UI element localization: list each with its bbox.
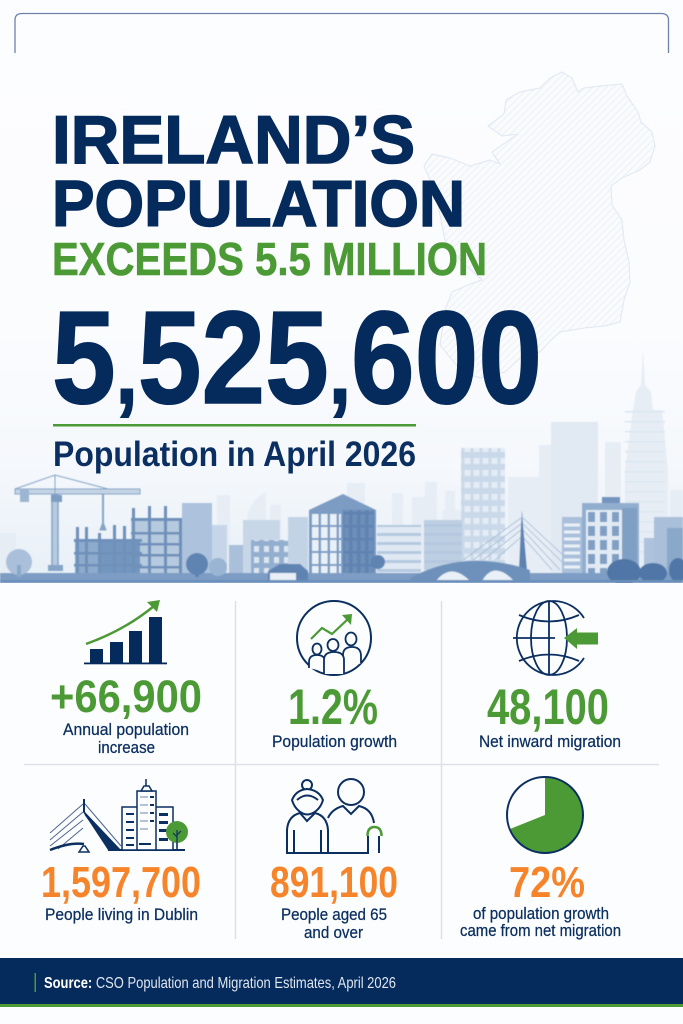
- ground strip: [0, 573, 683, 583]
- stat: Dublin: [41, 779, 201, 924]
- construction site: [74, 506, 182, 580]
- population caption: Population in April 2026: [53, 435, 416, 474]
- small house: [268, 564, 308, 580]
- value: 72%: [509, 858, 585, 907]
- right office building: [562, 497, 639, 580]
- far right buildings: [644, 517, 683, 578]
- hero background: [0, 0, 683, 583]
- value: 1,597,700: [41, 858, 201, 907]
- mid-rise buildings: [377, 520, 462, 575]
- title: [52, 102, 465, 240]
- label: People aged 65: [281, 905, 387, 924]
- title: POPULATION: [52, 167, 465, 240]
- value: 1.2%: [288, 679, 378, 735]
- skyline illustration: [0, 350, 683, 585]
- green divider: [53, 424, 416, 426]
- map of Ireland: [424, 72, 655, 378]
- value: 891,100: [270, 858, 398, 907]
- cable-stayed bridge: [410, 510, 563, 582]
- far skyline: [0, 350, 683, 583]
- stat: population growth: [272, 601, 397, 751]
- icon: 72% pie chart: [507, 777, 583, 853]
- label: and over: [304, 923, 363, 942]
- big window tower: [461, 448, 505, 573]
- label: People living in Dublin: [45, 905, 198, 924]
- left mid buildings: [182, 503, 308, 580]
- icon: rising bar chart: [84, 600, 167, 664]
- label: increase: [98, 738, 155, 757]
- stat: net migration: [479, 601, 621, 751]
- value: +66,900: [50, 671, 202, 722]
- stat: annual increase: [50, 600, 202, 757]
- stat: share from migration: [460, 777, 621, 940]
- ground shadow: [0, 580, 683, 583]
- stat: aged 65 and over: [270, 779, 398, 942]
- icon: people with growth arrow: [297, 601, 371, 675]
- label: came from net migration: [460, 921, 621, 940]
- crane: [15, 475, 140, 571]
- subtitle: EXCEEDS 5.5 MILLION: [52, 233, 487, 285]
- icon: older couple: [286, 779, 382, 853]
- icon: Dublin bridge and buildings: [50, 779, 188, 852]
- label: Net inward migration: [479, 732, 621, 751]
- trees: [6, 549, 683, 585]
- headline population number: 5,525,600: [52, 284, 542, 431]
- icon: globe with inward arrow: [513, 601, 598, 675]
- footer bar: [0, 958, 683, 1007]
- label: Annual population: [63, 720, 189, 739]
- label: Population growth: [272, 732, 397, 751]
- stats panel: [0, 583, 683, 958]
- title: IRELAND’S: [52, 102, 415, 178]
- top frame: [15, 14, 668, 53]
- source text: Source: CSO Population and Migration Estimates, April 2026: [44, 975, 396, 992]
- label: of population growth: [473, 904, 609, 923]
- centre office building: [309, 494, 376, 583]
- value: 48,100: [487, 679, 609, 735]
